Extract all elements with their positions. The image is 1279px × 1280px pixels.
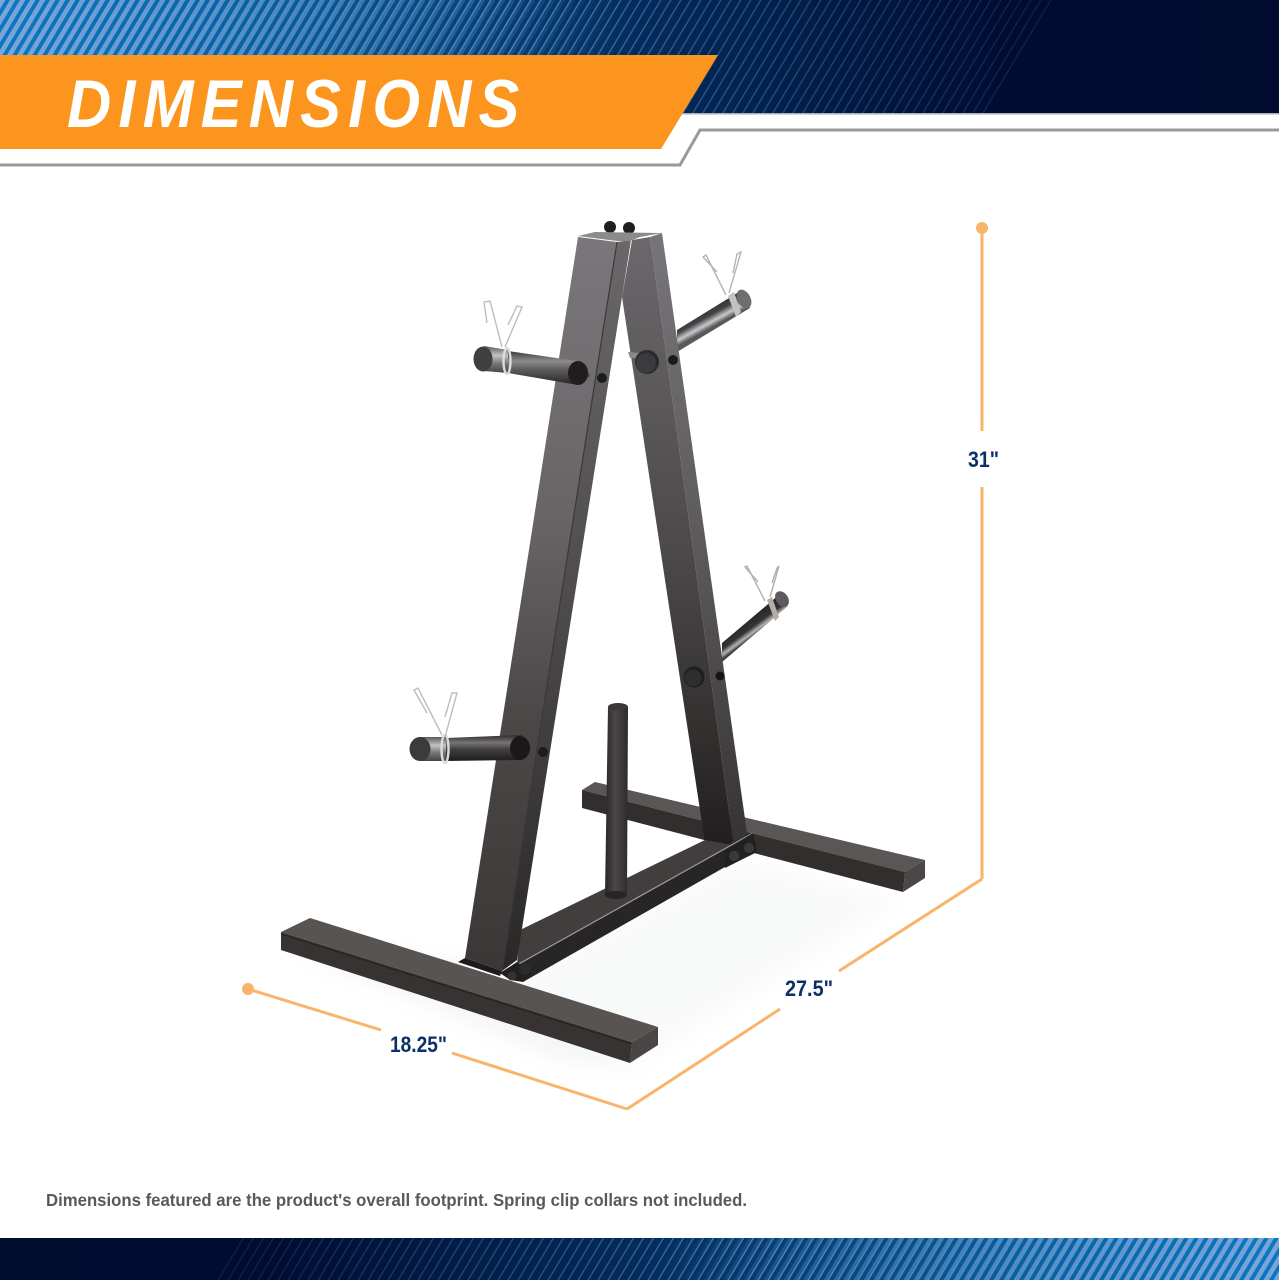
weight plate rack product image — [281, 221, 925, 1063]
title: DIMENSIONS — [67, 65, 527, 142]
header underline — [0, 130, 1279, 165]
width dimension line — [242, 983, 627, 1109]
length label: 27.5" — [785, 976, 833, 1001]
height dimension line — [976, 222, 988, 879]
lower left peg — [410, 688, 548, 763]
height label: 31" — [968, 447, 999, 472]
crossbar — [517, 833, 757, 982]
footnote: Dimensions featured are the product's overall footprint. Spring clip collars not included. — [46, 1190, 747, 1210]
bottom banner with diagonal stripes — [0, 1238, 1279, 1280]
base bracket — [500, 962, 532, 982]
title ribbon — [0, 55, 718, 149]
upper right peg — [677, 252, 754, 352]
lower right peg — [722, 566, 792, 662]
upper left peg — [474, 301, 607, 385]
front foot — [281, 918, 658, 1063]
left upright — [458, 237, 631, 976]
top plate and bolts — [578, 221, 662, 241]
top banner with diagonal stripes — [0, 0, 1279, 114]
centre post — [605, 703, 628, 899]
right upright — [622, 233, 747, 870]
floor shadows — [290, 860, 900, 1070]
rear foot — [582, 782, 925, 892]
length dimension line — [627, 879, 982, 1109]
width label: 18.25" — [390, 1032, 447, 1057]
